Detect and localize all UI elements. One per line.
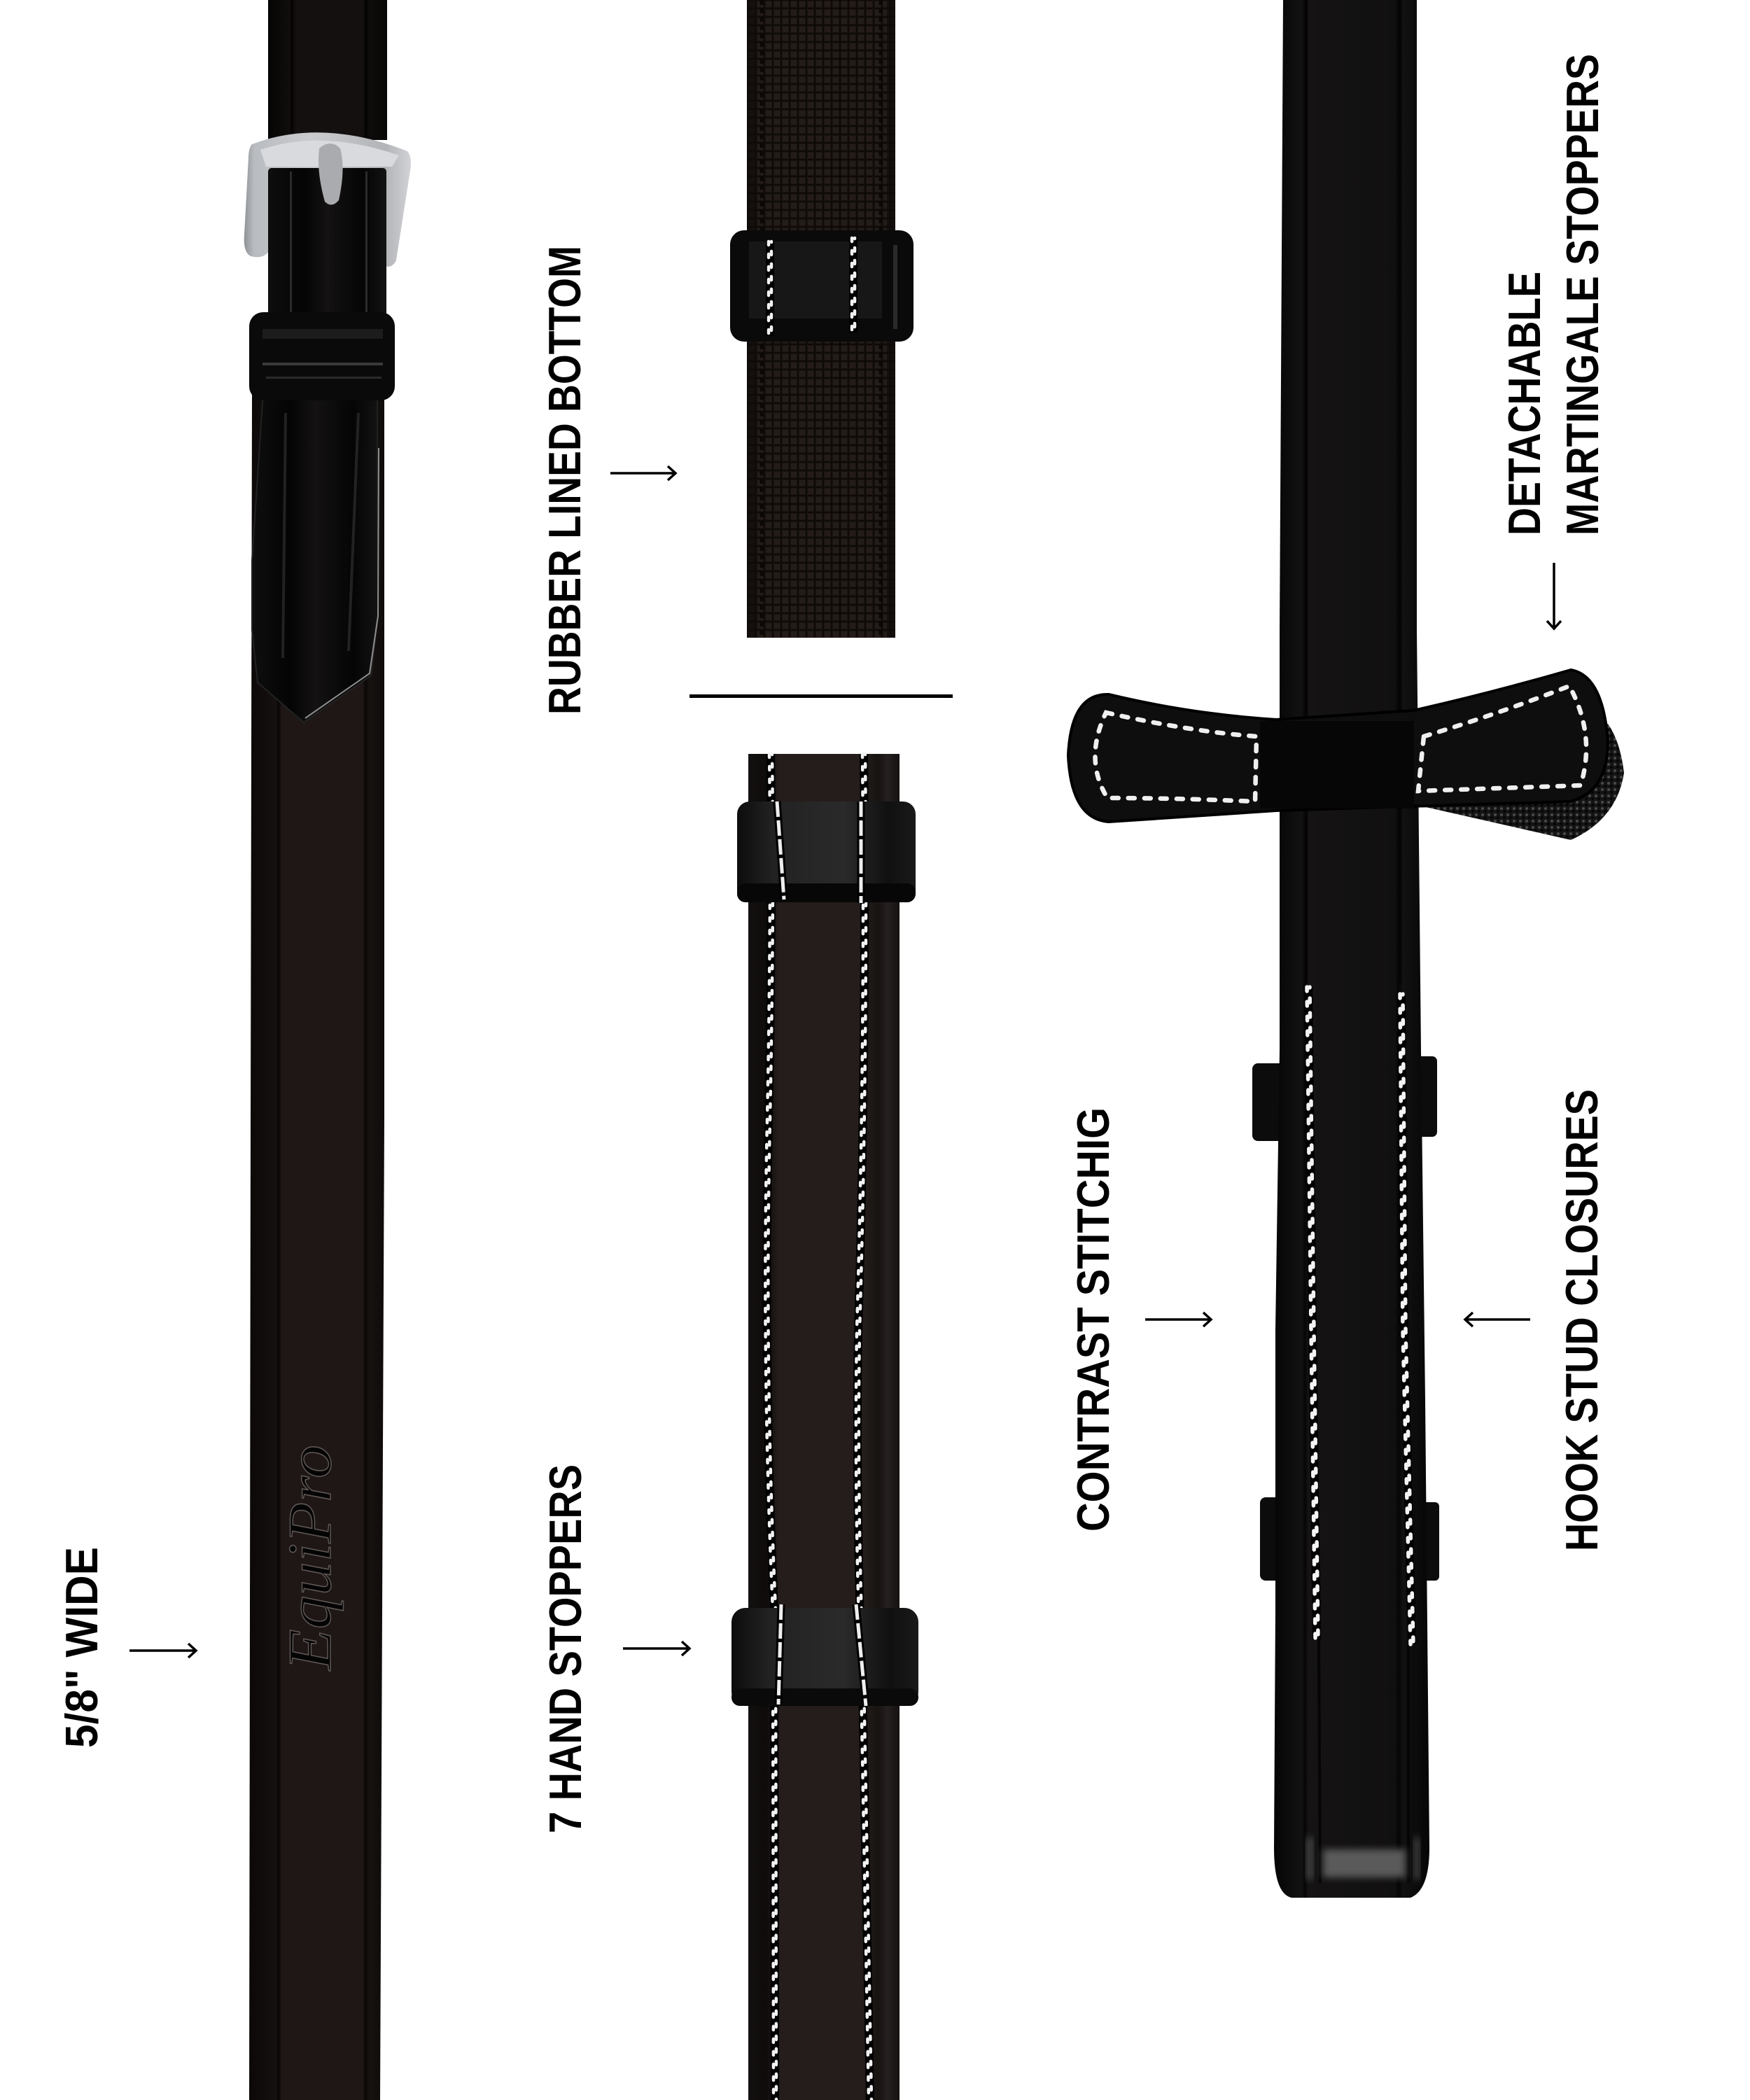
lower strap [249,392,384,2100]
martingale stopper rubber backing [1417,724,1624,840]
label: detachable martingale stoppers [1499,54,1608,536]
strap and loop [1274,0,1429,1898]
martingale stopper [1068,670,1608,822]
label: contrast stitching: CONTRAST STITCHIG [1068,1107,1119,1532]
arrow: hook stud closures [1465,1312,1530,1326]
label: rubber lined bottom: RUBBER LINED BOTTOM [539,246,590,715]
rein: rubber lined bottom [730,0,913,638]
label: 5/8 inch wide: 5/8" WIDE [56,1547,107,1748]
arrow: 5/8 inch wide [130,1644,196,1658]
buckle pin [318,144,343,205]
hand stopper lower [732,1604,918,1706]
stopper stitching [1095,686,1586,802]
hand stopper upper [737,802,916,903]
stitched strap [748,754,899,2100]
strap through buckle [268,168,386,318]
rein: martingale stopper and hook stud end [1068,0,1624,1898]
rein: contrast stitched section with hand stoppers [732,754,918,2100]
strap tongue [252,392,378,722]
silver buckle [244,132,411,267]
lower side keepers [1252,1056,1439,1581]
arrow: rubber lined bottom [610,466,676,480]
keeper loop [249,312,395,400]
arrow: detachable martingale stoppers [1547,563,1561,629]
divider line [690,694,953,698]
panel lines [1306,0,1408,1883]
embossed logo: EquiPro [276,1445,344,1672]
arrow: contrast stitching [1145,1312,1211,1326]
strap above buckle [268,0,387,140]
label: hook stud closures: HOOK STUD CLOSURES [1556,1089,1607,1551]
stitch rows [765,754,872,2100]
rein: buckle end with logo strap [244,0,411,2100]
label: detachable martingale stoppers: DETACHABLE [1499,272,1550,536]
rubber surface [747,0,895,638]
arrow: 7 hand stoppers [623,1642,690,1656]
loop gloss [1306,1837,1420,1879]
rubber section stopper [730,230,913,342]
label: 7 hand stoppers: 7 HAND STOPPERS [540,1464,591,1833]
contrast stitching rows [1307,987,1413,1644]
